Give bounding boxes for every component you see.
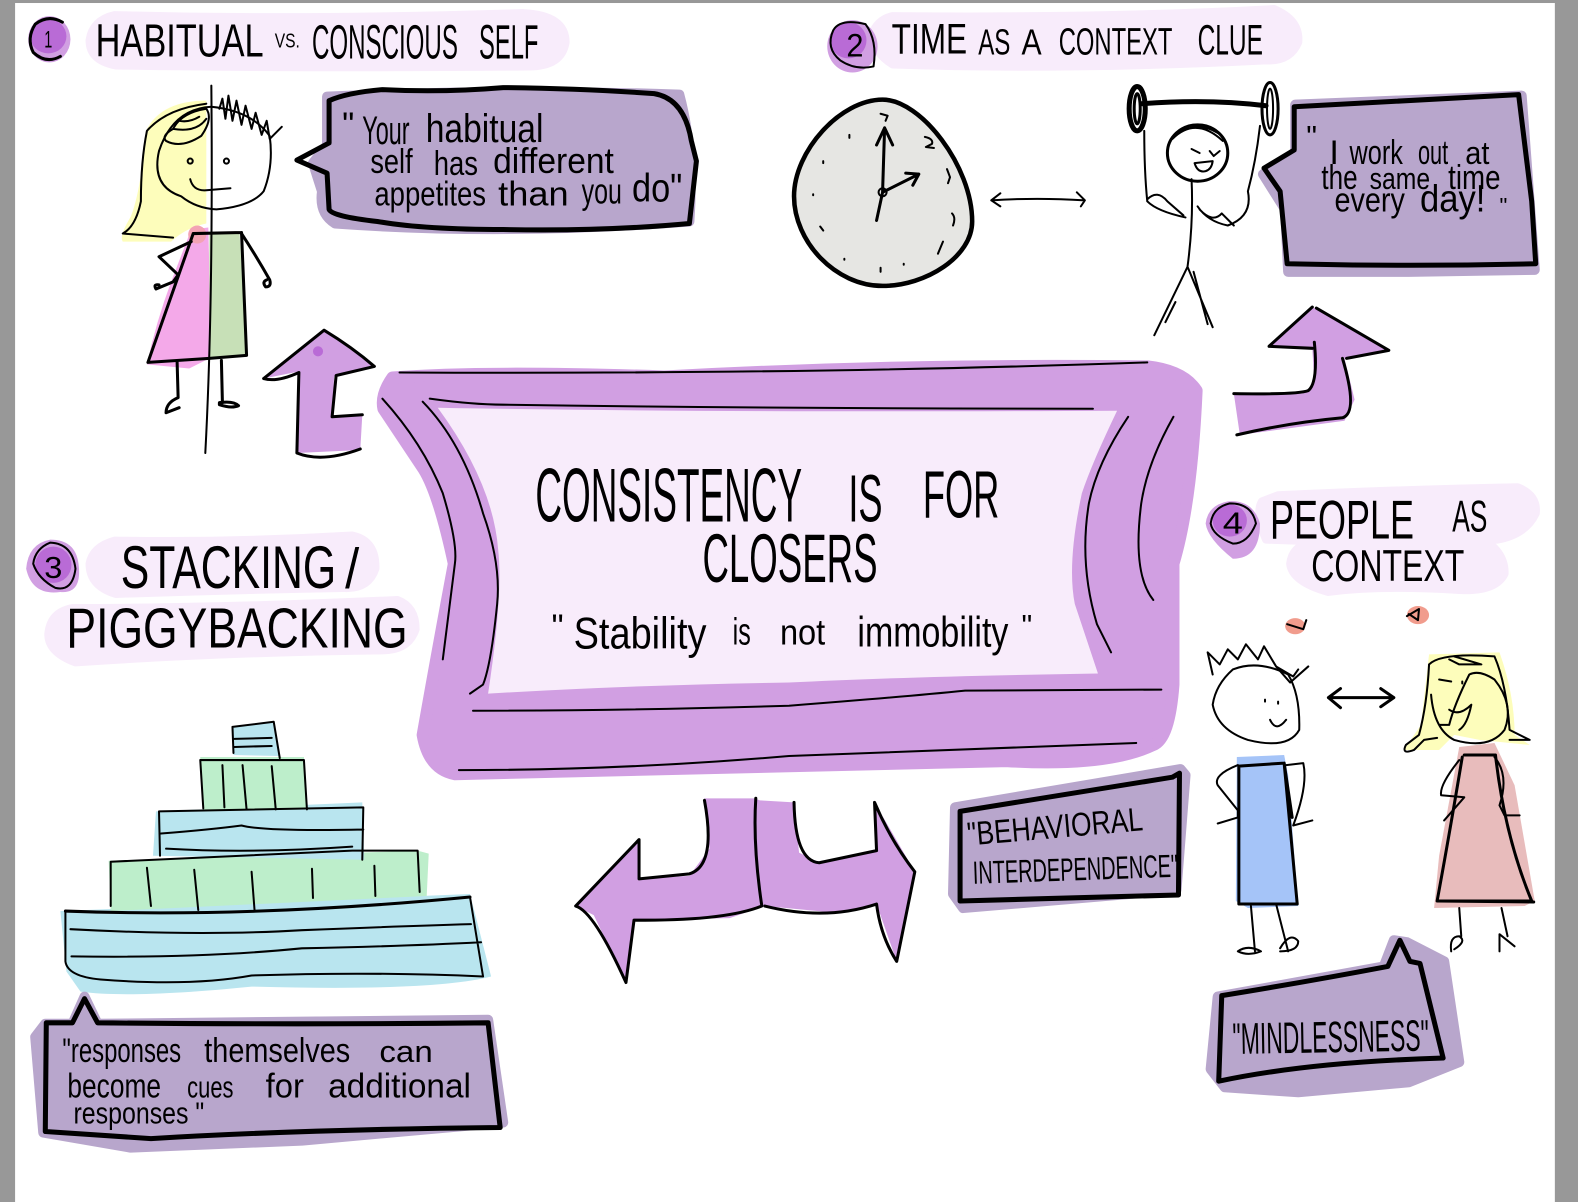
speech bubble 1: appetites: [374, 175, 486, 213]
heading pills 3: [48, 533, 416, 662]
arrow up to section 2: [1234, 307, 1389, 435]
stack of layered blocks: [60, 722, 491, 994]
speech bubble 2: day!: [1420, 177, 1485, 220]
speech bubble 3: additional: [328, 1067, 471, 1105]
speech bubble 1: habitual: [426, 106, 543, 151]
speech bubble 2: same: [1370, 163, 1430, 196]
speech bubble 1: Your: [362, 108, 410, 153]
title text: Stability: [574, 609, 707, 658]
clock: [794, 100, 972, 286]
two-way arrow clock to lifter: [991, 192, 1085, 206]
behavioral interdependence callout: "BEHAVIORAL: [966, 801, 1144, 854]
title text: not: [780, 611, 825, 652]
heading pills 4: CONTEXT: [1311, 542, 1464, 591]
speech bubble 3: themselves: [204, 1032, 350, 1070]
number badge 2: [827, 20, 878, 72]
section 3: stacking / piggybacking: [26, 533, 503, 1148]
speech bubble 2: I: [1329, 134, 1339, 172]
heading pill 1: CONSCIOUS: [312, 15, 458, 69]
two-way arrow between people: [1328, 689, 1394, 708]
speech bubble 2: [1263, 95, 1536, 272]
speech bubble 3: [35, 997, 503, 1148]
number badge 4: 4: [1223, 508, 1243, 541]
central title panel: [382, 362, 1197, 774]
speech bubble 3: cues: [187, 1071, 233, 1104]
speech bubble 1: has: [434, 145, 478, 183]
number badge 1: [28, 16, 70, 62]
speech bubble 1: do": [632, 165, 682, 210]
hearts: [1285, 606, 1429, 634]
title text: CLOSERS: [702, 520, 878, 597]
speech bubble 2: out: [1418, 134, 1448, 172]
section 1: habitual vs conscious self: [28, 13, 696, 457]
girl figure: [1404, 652, 1535, 951]
heading pill 2: A: [1021, 21, 1042, 62]
arrow up to section 1: [264, 330, 374, 457]
heading pill 1: [90, 13, 566, 69]
number badge 2: 2: [846, 27, 863, 63]
title text: FOR: [923, 458, 999, 532]
heading pill 1: HABITUAL: [96, 14, 264, 66]
heading pill 2: CONTEXT: [1059, 20, 1172, 63]
speech bubble 3: "responses: [62, 1032, 181, 1070]
title text: is: [733, 610, 751, 653]
heading pills 3: PIGGYBACKING: [66, 596, 408, 659]
speech bubble 2: the: [1321, 159, 1358, 197]
speech bubble 3: can: [379, 1036, 433, 1069]
speech bubble 2: work: [1349, 134, 1404, 172]
title text: CONSISTENCY: [535, 453, 802, 538]
frame sketch lines: [382, 362, 1173, 770]
title text: ": [1021, 610, 1032, 643]
heading pill 2: CLUE: [1198, 16, 1263, 63]
title text: immobility: [857, 608, 1009, 655]
behavioral interdependence callout: INTERDEPENDENCE": [972, 848, 1179, 891]
speech bubble 1: than: [498, 175, 569, 213]
speech bubble 2: time: [1448, 159, 1501, 197]
speech bubble 1: self: [370, 143, 413, 181]
heading pills 3: /: [345, 537, 360, 600]
section 4: people as context: [1206, 487, 1536, 1092]
pale inner panel: [438, 408, 1117, 694]
behavioral interdependence callout: [953, 769, 1186, 908]
heading pills 4: [1259, 487, 1536, 592]
section 2: time as a context cue: [794, 9, 1536, 435]
speech bubble 2: every: [1334, 181, 1406, 219]
mindlessness callout: [1211, 940, 1459, 1092]
speech bubble 1: ": [342, 106, 354, 144]
number badge 3: [26, 540, 79, 592]
heading pill 2: AS: [978, 21, 1010, 62]
speech bubble 1: [297, 88, 696, 230]
number badge 3: 3: [44, 552, 62, 585]
speech bubble 3: for: [266, 1067, 304, 1105]
heading pill 2: TIME: [892, 15, 967, 62]
heading pill 1: SELF: [479, 15, 538, 69]
boy figure: [1208, 644, 1312, 954]
speech bubble 2: ": [1306, 121, 1317, 154]
speech bubble 2: ": [1500, 193, 1507, 218]
purple frame: [383, 366, 1197, 774]
speech bubble 2: at: [1465, 135, 1489, 171]
title text: ": [551, 608, 564, 646]
half-and-half figure: [122, 86, 282, 453]
number badge 1: 1: [44, 26, 52, 53]
heading pills 3: STACKING: [121, 533, 336, 601]
double arrow from central panel: [576, 798, 915, 983]
speech bubble 1: you: [582, 170, 622, 211]
number badge 4: [1206, 501, 1260, 559]
title text: IS: [848, 462, 883, 536]
heading pill 1: VS.: [275, 30, 300, 52]
weightlifter figure: [1129, 83, 1278, 335]
title text: [535, 453, 1032, 658]
heading pill 2: [872, 9, 1298, 67]
heading pills 4: PEOPLE: [1270, 490, 1414, 551]
heading pills 4: AS: [1452, 493, 1487, 542]
speech bubble 3: responses ": [73, 1097, 204, 1130]
speech bubble 1: different: [493, 140, 614, 181]
speech bubble 3: become: [67, 1067, 161, 1105]
